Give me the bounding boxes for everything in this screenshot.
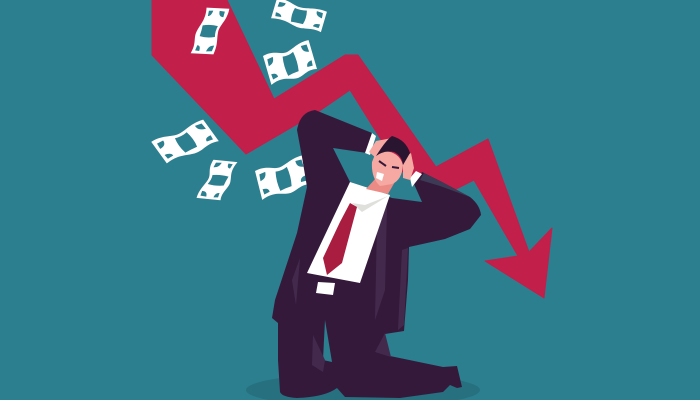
left cuff	[365, 133, 376, 155]
shirt	[307, 182, 390, 283]
bill 1	[189, 8, 230, 54]
ground shadow	[246, 373, 480, 400]
right cuff	[410, 171, 422, 187]
bill 5	[196, 160, 239, 200]
money bills	[151, 0, 327, 202]
head	[372, 151, 403, 186]
hair	[376, 136, 410, 165]
left hand	[369, 138, 398, 158]
belt buckle	[316, 282, 335, 295]
suit: jacket and trousers	[272, 110, 481, 398]
bill 4	[151, 119, 220, 165]
bill 6	[255, 155, 312, 202]
right hand	[403, 153, 414, 180]
jacket fold shading	[292, 205, 408, 330]
eyes and brow	[379, 161, 399, 168]
bill 2	[271, 0, 327, 34]
businessman	[272, 110, 481, 398]
shoulder highlight	[420, 173, 470, 197]
tie	[323, 203, 357, 275]
leg shading	[312, 333, 391, 372]
bill 3	[263, 40, 318, 87]
collar shadow	[352, 196, 388, 212]
red falling arrow	[152, 0, 552, 298]
neck	[366, 178, 396, 194]
mouth	[376, 172, 384, 181]
gap between legs	[323, 320, 332, 362]
